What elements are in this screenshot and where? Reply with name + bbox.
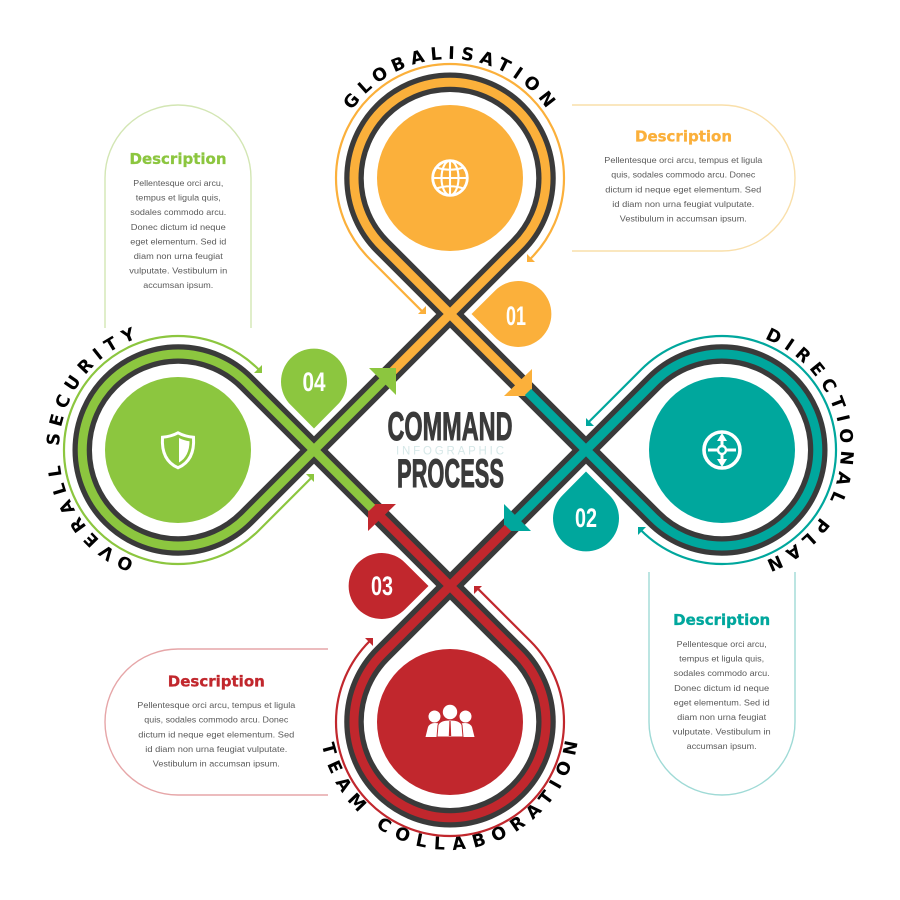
- circle: directional plan: [649, 377, 795, 523]
- panel: green description: accumsan ipsum.: [143, 280, 213, 290]
- icon: compass: [704, 432, 740, 468]
- panel: teal description: Description: [673, 612, 770, 629]
- ribbon segment: red: [354, 504, 546, 818]
- circle: overall security: [105, 377, 251, 523]
- panel: teal description: vulputate. Vestibulum in: [673, 727, 771, 737]
- panel: red description: [105, 649, 328, 795]
- panel: green description: Description: [130, 151, 226, 168]
- title: INFOGRAPHIC: [396, 446, 504, 458]
- thin arrow: red: [336, 586, 564, 836]
- panel: orange description: Pellentesque orci arcu, tempus et ligula: [604, 155, 763, 165]
- number marker: 04: [281, 349, 347, 428]
- thin arrow: green: [64, 336, 314, 564]
- number marker: 01: 01: [506, 301, 526, 331]
- panel: orange description: Vestibulum in accumsan ipsum.: [620, 214, 747, 224]
- thin arrow: teal: [586, 336, 836, 564]
- panel: teal description: sodales commodo arcu.: [674, 668, 770, 678]
- curved label: globalisation: GLOBALISATION: [344, 46, 556, 108]
- number marker: 04: 04: [302, 367, 326, 397]
- panel: red description: id diam non urna feugiat vulputate.: [145, 744, 287, 754]
- number marker: 02: 02: [575, 503, 597, 533]
- ribbon segment: green: [82, 354, 396, 546]
- panel: red description: Pellentesque orci arcu, tempus et ligula: [137, 700, 296, 710]
- panel: orange description: id diam non urna feugiat vulputate.: [612, 199, 754, 209]
- panel: teal description: eget elementum. Sed id: [674, 697, 770, 707]
- panel: orange description: [572, 105, 795, 251]
- panel: green description: vulputate. Vestibulum in: [129, 266, 228, 276]
- dark ribbon outline: [82, 82, 818, 818]
- panel: green description: diam non urna feugiat: [134, 251, 223, 261]
- panel: teal description: diam non urna feugiat: [677, 712, 767, 722]
- title: [388, 405, 512, 496]
- panel: orange description: quis, sodales commodo arcu. Donec: [611, 170, 756, 180]
- number marker: 02: [553, 472, 619, 551]
- panel: teal description: accumsan ipsum.: [687, 741, 757, 751]
- number marker: 01: [472, 281, 551, 347]
- circle: globalisation: [377, 105, 523, 251]
- panel: green description: eget elementum. Sed id: [130, 236, 227, 246]
- panel: teal description: [649, 572, 795, 795]
- ribbon segment: teal: [504, 354, 818, 546]
- panel: red description: Description: [168, 674, 265, 691]
- thin arrow: orange: [336, 64, 564, 314]
- panel: teal description: Donec dictum id neque: [674, 683, 769, 693]
- panel: green description: tempus et ligula quis,: [136, 193, 221, 203]
- icon: shield: [162, 433, 194, 468]
- panel: red description: quis, sodales commodo arcu. Donec: [144, 715, 289, 725]
- panel: orange description: dictum id neque eget elementum. Sed: [605, 184, 762, 194]
- icon: team: [426, 705, 474, 737]
- title: COMMAND: [388, 405, 512, 449]
- curved label: directional plan: DIRECTIONAL PLAN: [766, 328, 854, 572]
- panel: teal description: Pellentesque orci arcu,: [677, 639, 767, 649]
- curved label: team collaboration: TEAM COLLABORATION: [322, 741, 578, 850]
- circle: team collaboration: [377, 649, 523, 795]
- panel: red description: dictum id neque eget elementum. Sed: [138, 729, 295, 739]
- panel: green description: Donec dictum id neque: [131, 222, 226, 232]
- ribbon segment: orange: [354, 82, 546, 396]
- panel: red description: Vestibulum in accumsan ipsum.: [153, 759, 280, 769]
- panel: orange description: Description: [635, 129, 732, 146]
- number marker: 03: [349, 553, 428, 619]
- panel: teal description: tempus et ligula quis,: [679, 654, 764, 664]
- number marker: 03: 03: [371, 571, 393, 601]
- panel: green description: [105, 105, 251, 328]
- panel: green description: sodales commodo arcu.: [130, 207, 226, 217]
- title: PROCESS: [397, 452, 504, 496]
- curved label: overall security: OVERALL SECURITY: [46, 326, 132, 570]
- icon: globe: [433, 161, 467, 195]
- panel: green description: Pellentesque orci arcu,: [133, 178, 223, 188]
